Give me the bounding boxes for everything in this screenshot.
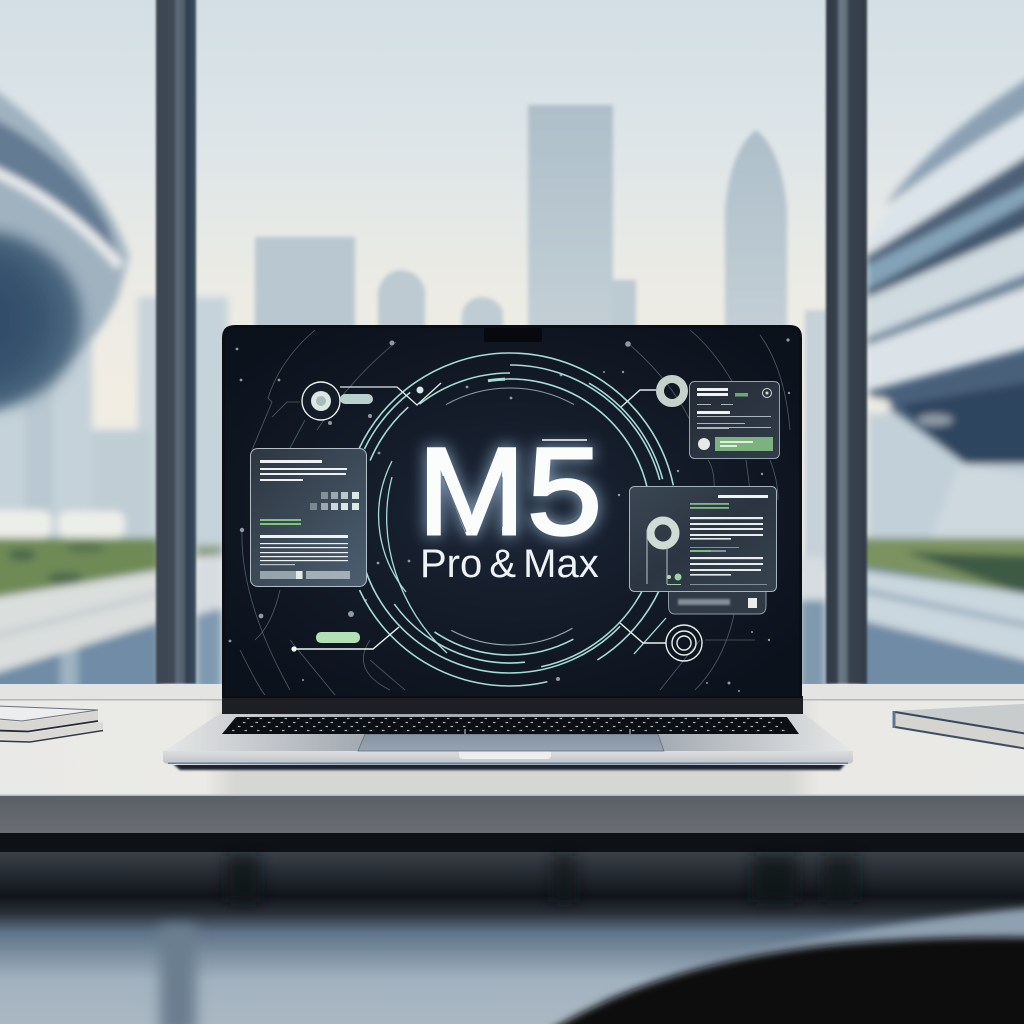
- notebooks left: [0, 706, 103, 742]
- title glow: M: [418, 423, 525, 561]
- panel: right large card: [630, 486, 776, 592]
- left distant city, greenery and railing: [0, 297, 228, 700]
- keyboard: [222, 717, 799, 734]
- bottom right node: concentric rings: [620, 623, 702, 661]
- thumb notch: [459, 751, 551, 759]
- faint circuit arcs: [240, 330, 790, 695]
- right curved building: [866, 62, 1024, 400]
- distant towers: [255, 105, 830, 570]
- laptop base: [163, 712, 853, 765]
- screen: [225, 328, 799, 696]
- donut icon: [647, 520, 682, 585]
- panel: left info card: [250, 448, 366, 586]
- laptop shadow: [172, 763, 846, 770]
- floor under desk: [0, 833, 1024, 1024]
- notebook right: [892, 703, 1024, 752]
- screen dots: [229, 338, 790, 692]
- screen bezel: [222, 325, 802, 698]
- window frames: [156, 0, 867, 684]
- title: M5: M: [418, 423, 525, 561]
- panel: top right card: [690, 382, 780, 458]
- title: M5: [418, 423, 602, 561]
- title: M5: 5: [527, 423, 602, 561]
- central ring arcs: [288, 298, 732, 742]
- laptop: [163, 298, 853, 770]
- title glow: 5: [527, 423, 602, 561]
- left curved building: [0, 80, 129, 420]
- title glow: [418, 423, 602, 561]
- panel: bottom small card: [668, 590, 766, 614]
- subtitle: Pro & Max: Pro & Max: [420, 542, 599, 586]
- front lip: [163, 751, 853, 764]
- bottom left node: green pill with line: [291, 627, 399, 652]
- right haze, underside, greenery and railing: [800, 345, 1024, 690]
- camera notch: [484, 328, 542, 342]
- background: blurred city through window: [0, 0, 1024, 700]
- desk: [0, 684, 1024, 833]
- right top node: donut: [621, 379, 684, 407]
- trackpad: [358, 734, 664, 751]
- left node: ring with pill: [302, 382, 441, 420]
- lid hinge: [222, 696, 803, 714]
